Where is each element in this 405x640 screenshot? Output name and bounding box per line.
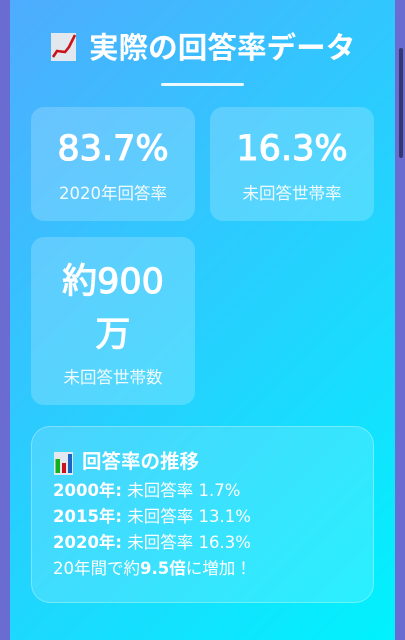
value: 16.3% xyxy=(236,129,348,169)
label: 2020年回答率 xyxy=(59,184,167,203)
scrollbar xyxy=(399,48,403,158)
value: 約900 xyxy=(62,262,164,302)
value: 万 xyxy=(95,315,130,355)
trend row 2015: 2015年: 未回答率 13.1% xyxy=(53,507,251,526)
title xyxy=(51,31,355,65)
icon: line chart xyxy=(51,33,76,61)
trend heading: 回答率の推移 xyxy=(82,450,199,473)
value xyxy=(62,262,164,355)
trend row 2020: 2020年: 未回答率 16.3% xyxy=(53,533,251,552)
trend summary: 20年間で約9.5倍に増加！ xyxy=(53,559,252,578)
title underline xyxy=(161,83,244,86)
trend row 2000: 2000年: 未回答率 1.7% xyxy=(53,481,240,500)
label: 未回答世帯数 xyxy=(64,368,162,387)
stat card: non-response households xyxy=(31,237,195,405)
stat card: non-response rate xyxy=(210,107,374,221)
panel: response rate trend xyxy=(31,426,374,603)
label: 未回答世帯率 xyxy=(242,184,342,203)
icon: bar chart xyxy=(54,452,73,475)
value: 83.7% xyxy=(57,129,169,169)
stat card: 2020 response rate xyxy=(31,107,195,221)
title text: 実際の回答率データ xyxy=(89,31,355,65)
